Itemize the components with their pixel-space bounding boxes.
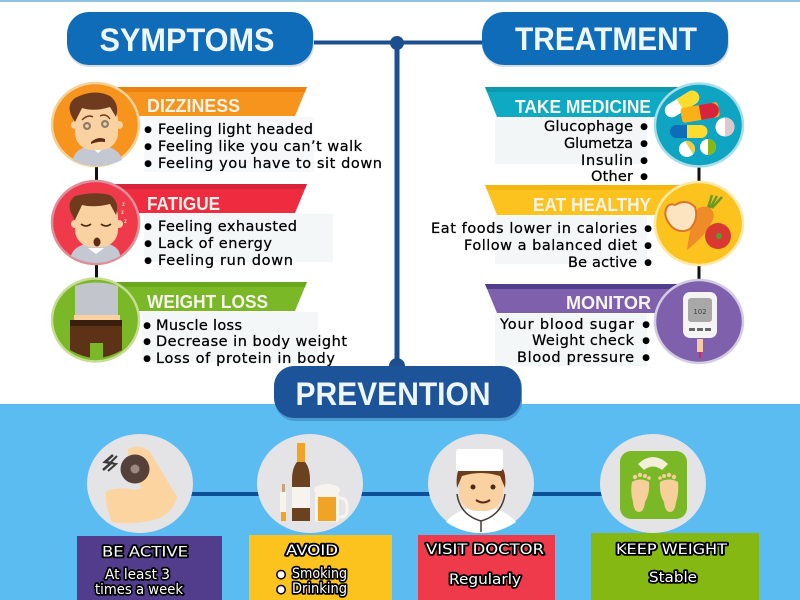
ribbon: eat healthy: [485, 185, 699, 215]
list: dizziness symptoms: ●: [144, 142, 152, 152]
icon: weighing scale: [600, 434, 706, 533]
icon: slim waist: [52, 278, 139, 362]
card: be active: BE ACTIVE: [102, 544, 188, 560]
card: avoid: ●: [277, 585, 285, 595]
list: weight loss symptoms: Muscle loss: [156, 318, 242, 334]
ribbon: monitor: MONITOR: [566, 293, 651, 313]
icon: doctor: [428, 434, 534, 533]
panel: keep weight: [591, 434, 759, 600]
card: avoid: Drinking: [292, 581, 347, 597]
card: be active: [77, 536, 222, 600]
list: monitoring: Weight check: [532, 333, 635, 349]
list: dizziness symptoms: Feeling light headed: [158, 122, 313, 138]
icon: tired man: [52, 181, 139, 264]
panel: dizziness: [52, 83, 382, 172]
list: monitoring: Your blood sugar: [499, 317, 634, 333]
card: keep weight: KEEP WEIGHT: [616, 542, 728, 558]
list: healthy eating: ●: [644, 241, 652, 251]
list: monitoring: ●: [642, 336, 650, 346]
prevention background band: [0, 404, 800, 600]
icon: flexed arm with weight: [87, 434, 193, 533]
icon: tired man: z: [122, 202, 125, 208]
ribbon: take medicine: [485, 87, 699, 117]
card: keep weight: Stable: [649, 570, 697, 586]
panel: fatigue: [52, 181, 333, 269]
panel: eat healthy: [431, 182, 743, 271]
ribbon: take medicine: TAKE MEDICINE: [515, 97, 651, 117]
card: avoid: [249, 535, 392, 600]
list: dizziness symptoms: ●: [144, 159, 152, 169]
list: medicines: [495, 118, 648, 185]
list: dizziness symptoms: Feeling you have to sit down: [158, 156, 382, 172]
list: healthy eating: Eat foods lower in calories: [431, 221, 637, 237]
ribbon: eat healthy: EAT HEALTHY: [533, 195, 651, 215]
list: fatigue symptoms: Feeling run down: [158, 253, 293, 269]
list: medicines: Glucophage: [544, 119, 633, 135]
ribbon: dizziness: DIZZINESS: [147, 96, 240, 116]
heading: treatment: TREATMENT: [515, 21, 697, 57]
list: medicines: Other: [591, 169, 633, 185]
panel: visit doctor: [418, 434, 555, 600]
icon: fruit and vegetables: [655, 182, 743, 265]
heading: symptoms: SYMPTOMS: [100, 22, 274, 58]
list: healthy eating: Be active: [568, 255, 637, 271]
list: fatigue symptoms: Lack of energy: [158, 236, 272, 252]
list: medicines: ●: [640, 122, 648, 132]
heading: symptoms: [67, 12, 314, 67]
icon: tired man: z: [121, 210, 124, 216]
list: medicines: ●: [640, 139, 648, 149]
list: monitoring: Blood pressure: [517, 350, 634, 366]
heading: prevention: PREVENTION: [296, 376, 490, 412]
list: monitoring: ●: [642, 353, 650, 363]
list: monitoring: [495, 314, 650, 366]
list: medicines: Glumetza: [564, 136, 633, 152]
list: weight loss symptoms: ●: [143, 321, 151, 331]
list: medicines: ●: [640, 156, 648, 166]
card: visit doctor: VISIT DOCTOR: [426, 542, 544, 558]
prevention connector: [190, 492, 610, 496]
list: weight loss symptoms: [142, 312, 347, 367]
heading: prevention: [274, 366, 522, 421]
list: weight loss symptoms: ●: [143, 354, 151, 364]
panel: be active: [77, 434, 222, 600]
ribbon: fatigue: [96, 184, 307, 214]
icon: glucose meter: 102: [693, 308, 707, 316]
list: weight loss symptoms: ●: [143, 337, 151, 347]
card: avoid: AVOID: [286, 543, 338, 559]
card: visit doctor: [418, 535, 555, 600]
list: fatigue symptoms: Feeling exhausted: [158, 219, 297, 235]
list: medicines: Insulin: [581, 153, 633, 169]
icon: dizzy man: [52, 83, 139, 166]
list: healthy eating: Follow a balanced diet: [464, 238, 637, 254]
list: dizziness symptoms: ●: [144, 125, 152, 135]
list: fatigue symptoms: ●: [144, 222, 152, 232]
heading: treatment: [482, 12, 729, 67]
list: fatigue symptoms: [144, 214, 333, 269]
ribbon: fatigue: FATIGUE: [147, 194, 220, 214]
icon: glucose meter: [655, 280, 743, 363]
list: healthy eating: [431, 216, 652, 271]
list: dizziness symptoms: Feeling like you can’t walk: [158, 139, 363, 155]
card: avoid: ●: [277, 570, 285, 580]
icon: cigarette, bottle and beer: [257, 434, 363, 533]
list: medicines: ●: [640, 172, 648, 182]
card: be active: At least 3: [105, 567, 170, 583]
list: monitoring: ●: [642, 320, 650, 330]
ribbon: weight loss: [96, 282, 307, 312]
card: keep weight: [591, 533, 759, 600]
panel: monitor: [485, 280, 743, 366]
ribbon: weight loss: WEIGHT LOSS: [147, 292, 268, 312]
icon: pills: [655, 84, 743, 166]
ribbon: dizziness: [96, 87, 307, 116]
vertical links between treatment circles: [698, 165, 700, 281]
card: visit doctor: Regularly: [449, 572, 521, 588]
card: be active: times a week: [95, 582, 184, 598]
panel: avoid: [249, 434, 392, 600]
icon: tired man: z: [124, 219, 127, 225]
list: healthy eating: ●: [644, 224, 652, 234]
vertical links between symptom circles: [95, 165, 98, 279]
list: weight loss symptoms: Decrease in body weight: [156, 334, 347, 350]
list: healthy eating: ●: [644, 258, 652, 268]
ribbon: monitor: [485, 284, 699, 313]
panel: take medicine: [485, 84, 743, 185]
central connector: [313, 36, 483, 374]
list: fatigue symptoms: ●: [144, 256, 152, 266]
list: fatigue symptoms: ●: [144, 239, 152, 249]
list: weight loss symptoms: Loss of protein in body: [156, 351, 335, 367]
panel: weight loss: [52, 278, 347, 367]
list: dizziness symptoms: [144, 117, 382, 172]
card: avoid: Smoking: [292, 566, 347, 582]
